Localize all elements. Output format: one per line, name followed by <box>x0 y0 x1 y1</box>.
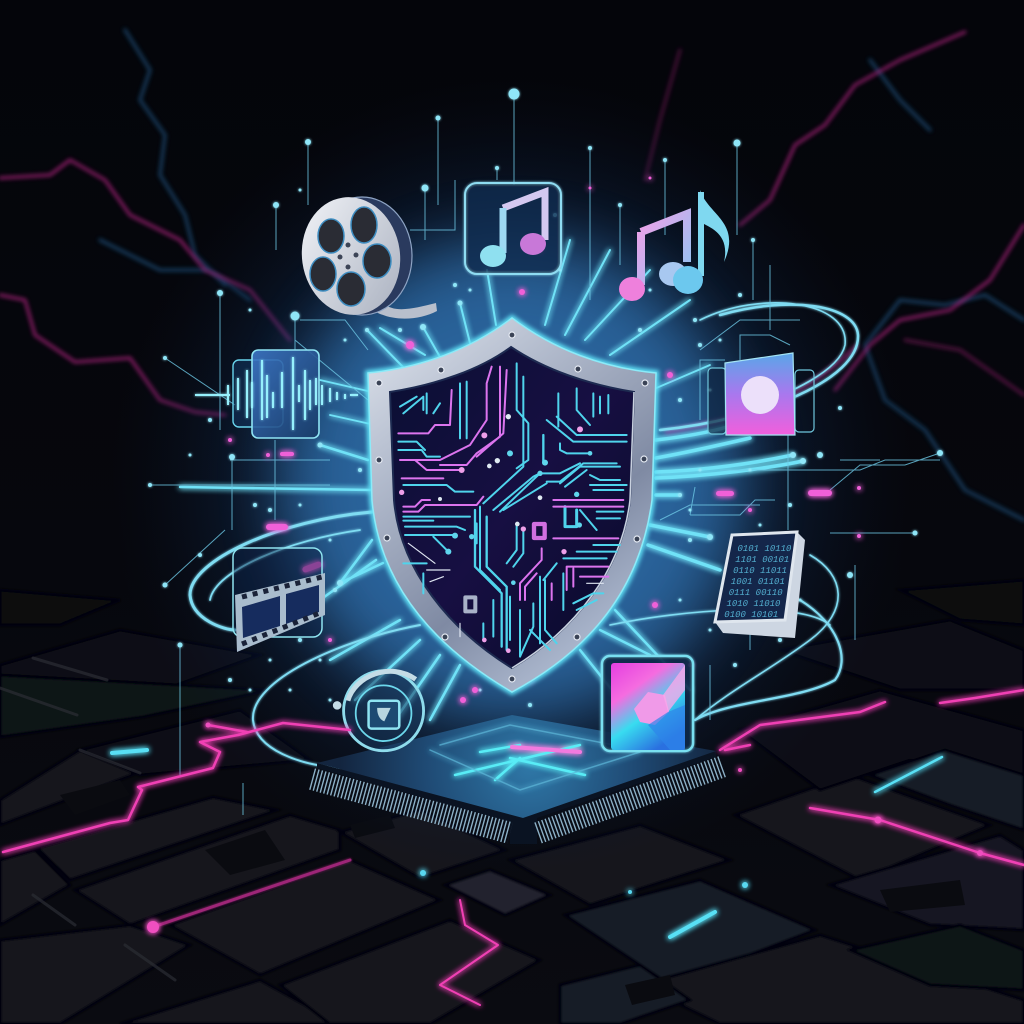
binary digits: 0110 11011 <box>732 565 789 576</box>
binary digits <box>723 543 793 620</box>
binary digits: 0100 10101 <box>723 609 780 620</box>
icon: circular check badge <box>333 671 424 751</box>
icon: double music notes <box>619 190 729 301</box>
icon: film reel <box>294 191 437 321</box>
glowing board traces <box>3 690 1024 1005</box>
data nodes and stems <box>148 88 943 815</box>
shield steel frame <box>368 318 656 692</box>
chip squares <box>534 524 545 538</box>
book cover <box>715 532 797 622</box>
orbit swirls <box>190 303 858 768</box>
panel edge highlight <box>512 392 634 668</box>
shield circuit panel <box>390 347 634 668</box>
icon: gradient card <box>602 656 693 751</box>
reel tape <box>376 303 437 319</box>
circuit board floor <box>0 580 1024 1024</box>
chip body <box>317 751 716 844</box>
chip pins <box>312 766 724 833</box>
circuit traces <box>398 363 627 657</box>
binary digits: 1101 00101 <box>734 554 791 565</box>
board surface details <box>0 658 965 1005</box>
lightning arcs <box>0 30 1024 520</box>
binary digits: 1001 01101 <box>730 576 786 587</box>
icon: film strip <box>233 548 325 652</box>
rivets <box>376 332 648 682</box>
chip <box>312 715 724 844</box>
icon: waveform tile <box>195 350 358 438</box>
reel back <box>312 197 412 315</box>
icon: image card <box>708 353 814 435</box>
energy rays <box>180 240 803 720</box>
icon: book of binary data <box>715 532 805 638</box>
shield rim glow <box>368 318 656 692</box>
book pages <box>715 532 805 638</box>
binary digits: 1010 11010 <box>725 598 782 609</box>
chip top surface <box>317 715 716 818</box>
board nodes <box>147 722 983 933</box>
binary digits: 0111 00110 <box>728 587 784 598</box>
icon: music note tile <box>465 183 561 274</box>
soft glow behind shield <box>282 240 742 720</box>
reel front <box>294 191 408 321</box>
chip glowing surface <box>430 725 640 790</box>
pink ribbon on right <box>665 345 858 432</box>
binary digits: 0101 10110 <box>736 543 793 554</box>
shield <box>368 318 656 692</box>
